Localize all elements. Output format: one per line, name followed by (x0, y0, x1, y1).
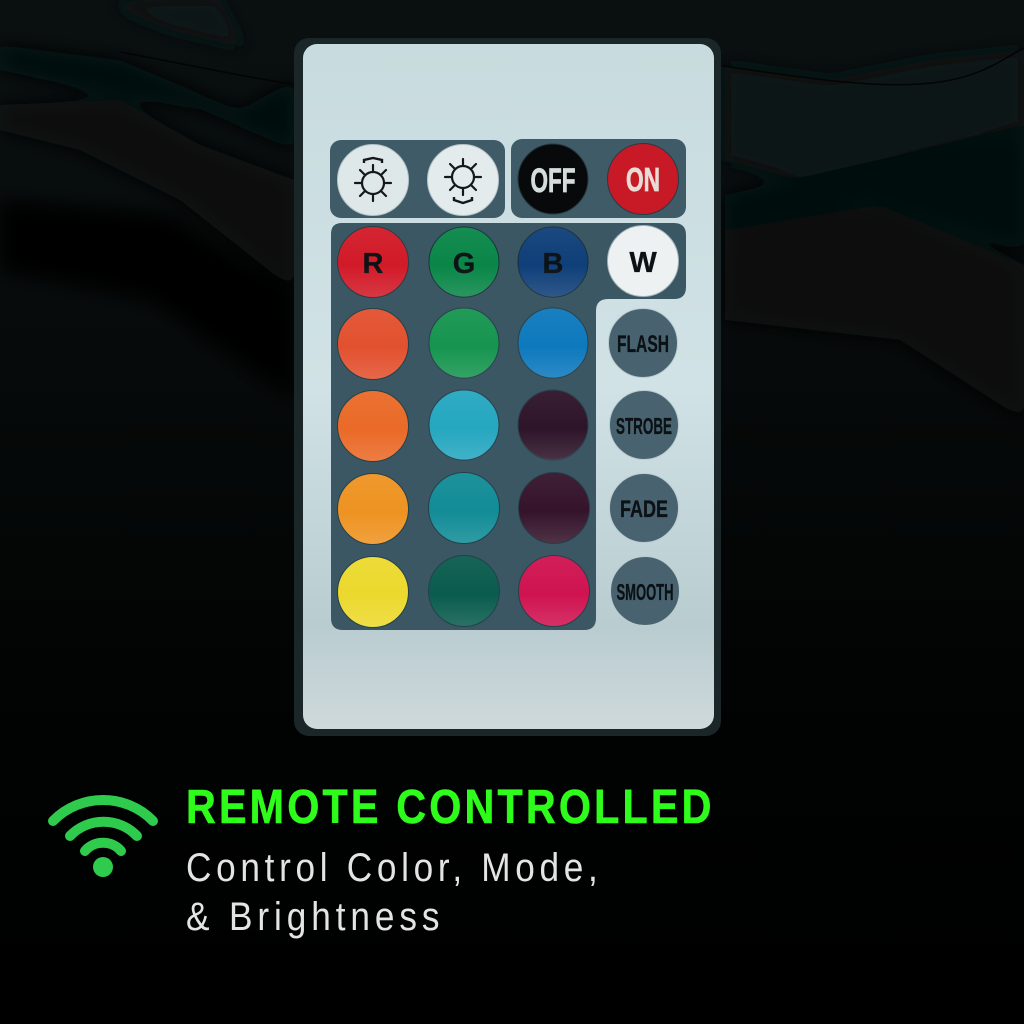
button: STROBE (610, 390, 678, 460)
button: B (518, 227, 588, 297)
button: G (429, 227, 499, 297)
colour buttons grid (338, 308, 590, 628)
button gloss highlights (338, 227, 589, 627)
button: OFF: OFF (530, 162, 576, 200)
button: STROBE: STROBE (616, 413, 672, 439)
description text (186, 845, 598, 938)
remote face (303, 44, 714, 729)
button: ON (608, 144, 678, 214)
button: brightness up (338, 144, 408, 216)
title: REMOTE CONTROLLED (186, 780, 711, 834)
button: FADE: FADE (620, 496, 668, 523)
button: W: W (629, 247, 657, 279)
button: SMOOTH: SMOOTH (616, 579, 674, 605)
remote control (294, 38, 721, 736)
button: FLASH: FLASH (617, 331, 669, 358)
button: B: B (543, 248, 563, 280)
button: G: G (453, 248, 475, 280)
button: FADE (610, 474, 678, 542)
panel: brightness buttons (330, 140, 505, 218)
panel: colour buttons (331, 223, 686, 630)
button: ON: ON (626, 161, 660, 198)
panel: power buttons (511, 139, 686, 218)
button: SMOOTH (610, 556, 680, 626)
description text: & Brightness (186, 894, 439, 938)
button: brightness down (428, 144, 498, 216)
button: FLASH (608, 308, 678, 378)
description text: Control Color, Mode, (186, 845, 598, 889)
button: R: R (363, 248, 384, 280)
button: W (608, 226, 678, 296)
icon: wifi signal (53, 800, 153, 877)
button: R (338, 226, 408, 298)
remote body (294, 38, 721, 736)
button: OFF (518, 144, 588, 214)
